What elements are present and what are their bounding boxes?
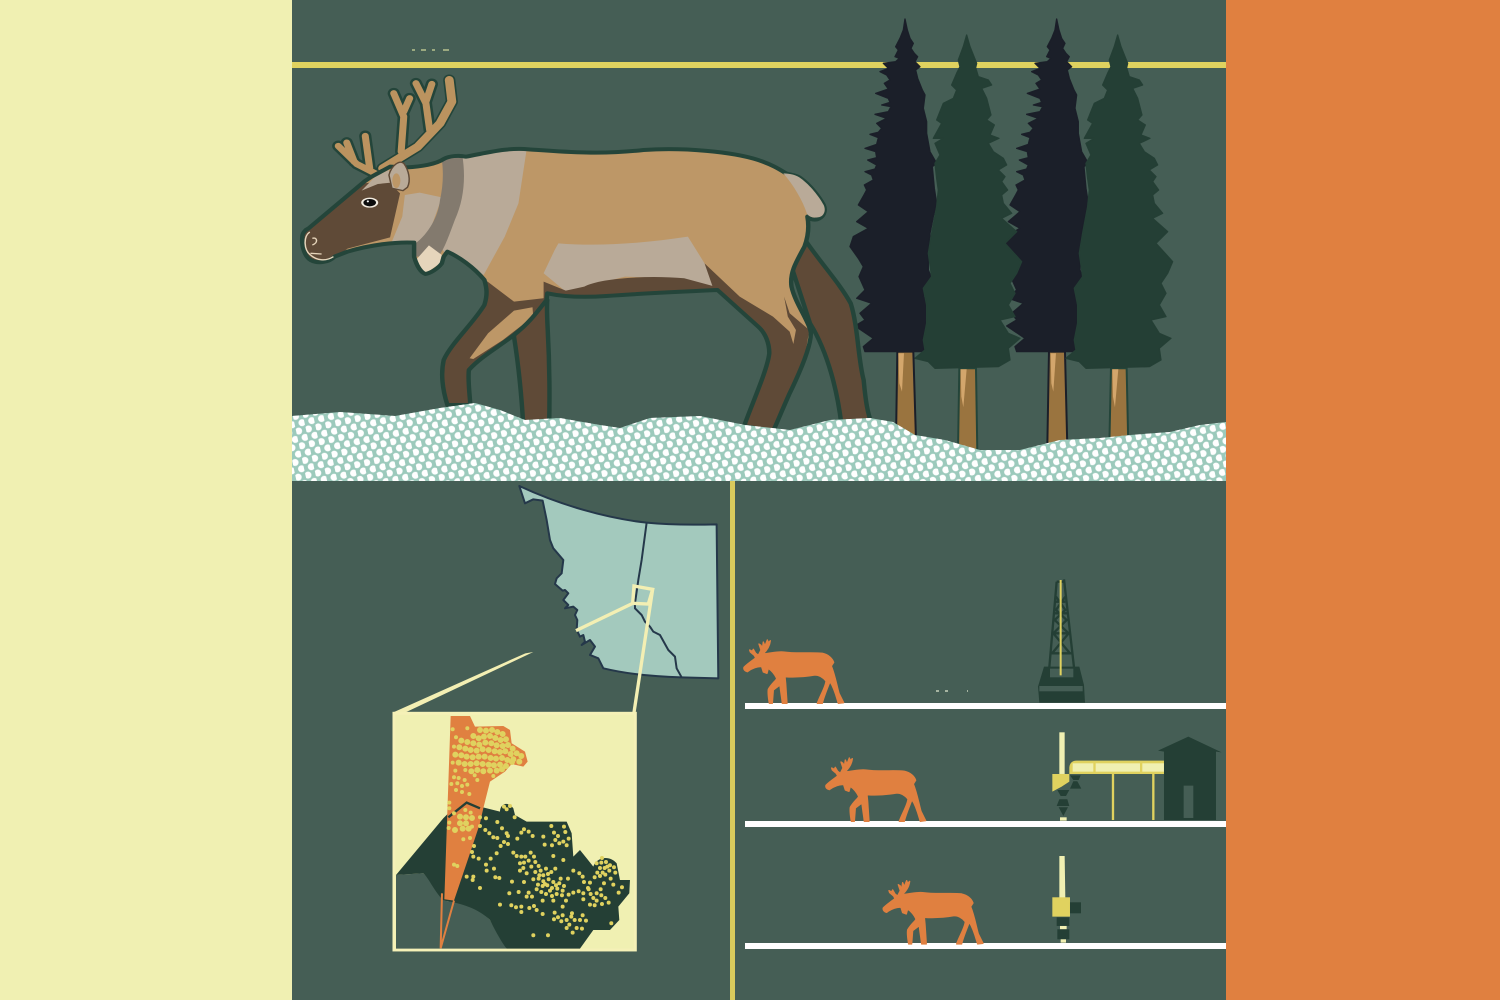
tree trunk 1 [896, 352, 916, 440]
caribou 3 [883, 881, 983, 944]
central panel [292, 0, 1226, 1000]
ground shelf 1 [745, 703, 1226, 709]
drilling rig [1038, 579, 1085, 703]
belly patch [544, 237, 721, 292]
tree trunk 3 [1047, 352, 1067, 447]
valve icons [1057, 775, 1081, 816]
collar tag [416, 245, 442, 273]
snow [292, 403, 1226, 481]
locator square [633, 586, 653, 604]
wellhead stem [1059, 732, 1065, 774]
foreleg light line [514, 305, 547, 335]
pipeline and building [1052, 732, 1222, 821]
antlers [338, 80, 452, 174]
dark tree 3 [1002, 19, 1088, 352]
zoom lines [576, 589, 653, 713]
inset box [394, 713, 635, 950]
inset lower-left ground [396, 873, 507, 949]
caribou 1 [744, 640, 844, 703]
building door [1184, 786, 1193, 818]
dark tree 1 [850, 19, 937, 352]
tree trunk 4 [1109, 368, 1128, 447]
near front leg [444, 281, 544, 403]
ground shelf 3 [745, 943, 1226, 949]
body [302, 149, 825, 432]
pipe [1069, 761, 1164, 774]
eye [361, 198, 378, 208]
ear [389, 162, 409, 191]
orange wedge [441, 716, 528, 948]
forehead patch [362, 170, 391, 191]
far front leg [514, 300, 550, 425]
dense well dots [455, 730, 521, 830]
middle specks [936, 690, 968, 692]
belly shadow [544, 277, 714, 298]
provincial border [635, 523, 682, 677]
range in dark green [396, 802, 630, 949]
pipe supports [1113, 774, 1153, 820]
wellhead box [1052, 774, 1069, 792]
neck patch [392, 193, 442, 245]
building [1158, 737, 1222, 820]
foreleg highlight [470, 307, 533, 359]
left colour band [0, 0, 292, 1000]
scattered well dots [449, 728, 622, 935]
green tree 2 [915, 35, 1022, 368]
ground shelf 2 [745, 821, 1226, 827]
shoulder patch [438, 147, 527, 275]
wellhead 3 [1052, 856, 1081, 943]
dark chevron [448, 803, 480, 817]
far rear leg [792, 242, 872, 425]
right colour band [1226, 0, 1500, 1000]
head [299, 181, 400, 263]
zoom line to inset [393, 652, 533, 713]
tail [783, 173, 825, 217]
small caribou silhouettes [744, 640, 983, 944]
industrial structures [1038, 579, 1222, 943]
muzzle [305, 232, 333, 260]
caribou 2 [826, 758, 926, 821]
top specks [412, 49, 449, 51]
green tree 4 [1066, 35, 1173, 368]
reindeer [299, 80, 872, 437]
trees [850, 19, 1173, 452]
collar [415, 155, 464, 257]
tree trunk 2 [958, 368, 977, 452]
near rear leg [705, 263, 814, 437]
province map [519, 486, 718, 678]
horizontal yellow line [292, 62, 1226, 68]
map and inset [393, 486, 718, 950]
vertical yellow divider [730, 481, 735, 1000]
body outline [302, 149, 825, 432]
